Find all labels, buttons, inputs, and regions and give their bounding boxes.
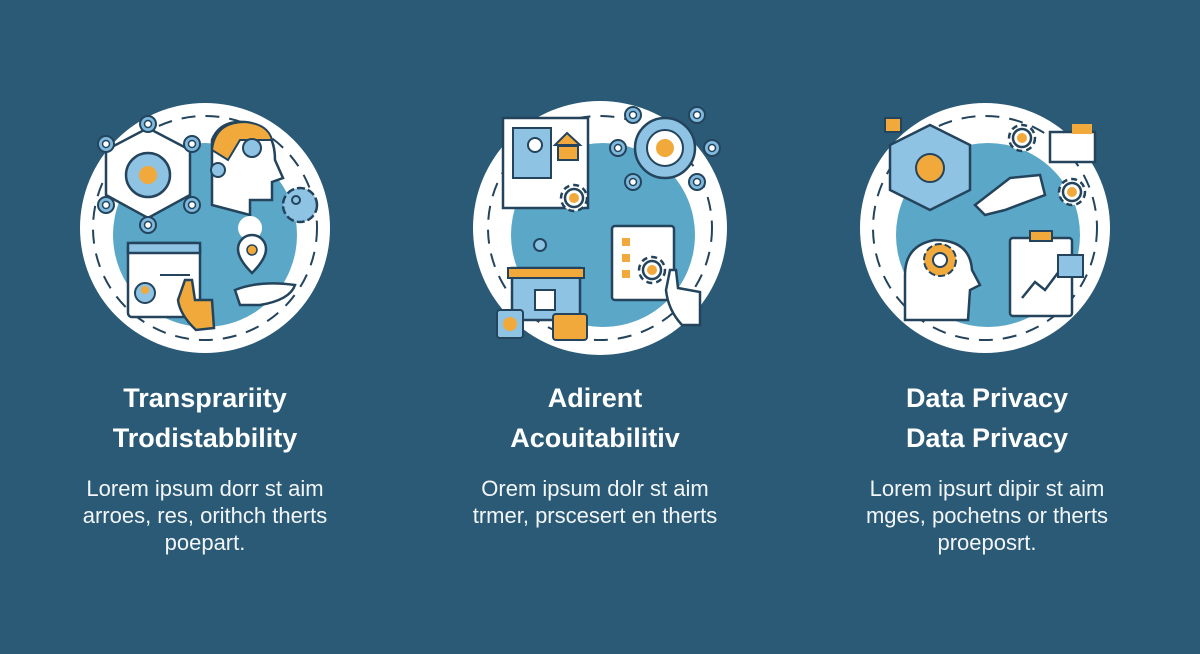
title: column 2 <box>510 383 680 453</box>
icon: browser with hand <box>128 243 214 330</box>
icon: ballot box <box>497 239 587 340</box>
text: column 3: proeposrt. <box>937 530 1037 555</box>
icon: checklist with hand <box>612 226 700 325</box>
text: column 1: arroes, res, orithch therts <box>83 503 327 528</box>
text: column 1: poepart. <box>165 530 245 555</box>
icon: hexagon cube <box>885 118 970 210</box>
icon: document with bank <box>503 118 588 211</box>
text: column 2: Orem ipsum dolr st aim <box>481 476 709 501</box>
icon: gear network <box>610 107 720 190</box>
text: column 3: Lorem ipsurt dipir st aim <box>870 476 1104 501</box>
circle 3 <box>860 103 1110 353</box>
icon: hand with gears and chart <box>975 124 1095 215</box>
icon: clipboard chart <box>1010 231 1083 316</box>
icon: location hand <box>235 216 295 305</box>
title: column 3: Data Privacy <box>906 383 1068 413</box>
title: column 1 <box>113 383 298 453</box>
icon: head <box>211 122 283 215</box>
title: column 1: Trodistabbility <box>113 423 297 453</box>
text: column 3: mges, pochetns or therts <box>866 503 1108 528</box>
circle 2 <box>473 101 727 355</box>
text: column 1 <box>83 476 327 555</box>
title: column 1: Transprariity <box>123 383 287 413</box>
icon: virus <box>283 188 317 222</box>
title: column 2: Acouitabilitiv <box>510 423 680 453</box>
title: column 2: Adirent <box>548 383 642 413</box>
icon: network hub <box>98 116 200 233</box>
text: column 3 <box>866 476 1108 555</box>
text: column 2: trmer, prscesert en therts <box>473 503 717 528</box>
text: column 2 <box>473 476 717 528</box>
title: column 3 <box>906 383 1068 453</box>
circle 1 <box>80 103 330 353</box>
icon: head with gear <box>905 240 980 320</box>
title: column 3: Data Privacy <box>906 423 1068 453</box>
text: column 1: Lorem ipsum dorr st aim <box>86 476 324 501</box>
